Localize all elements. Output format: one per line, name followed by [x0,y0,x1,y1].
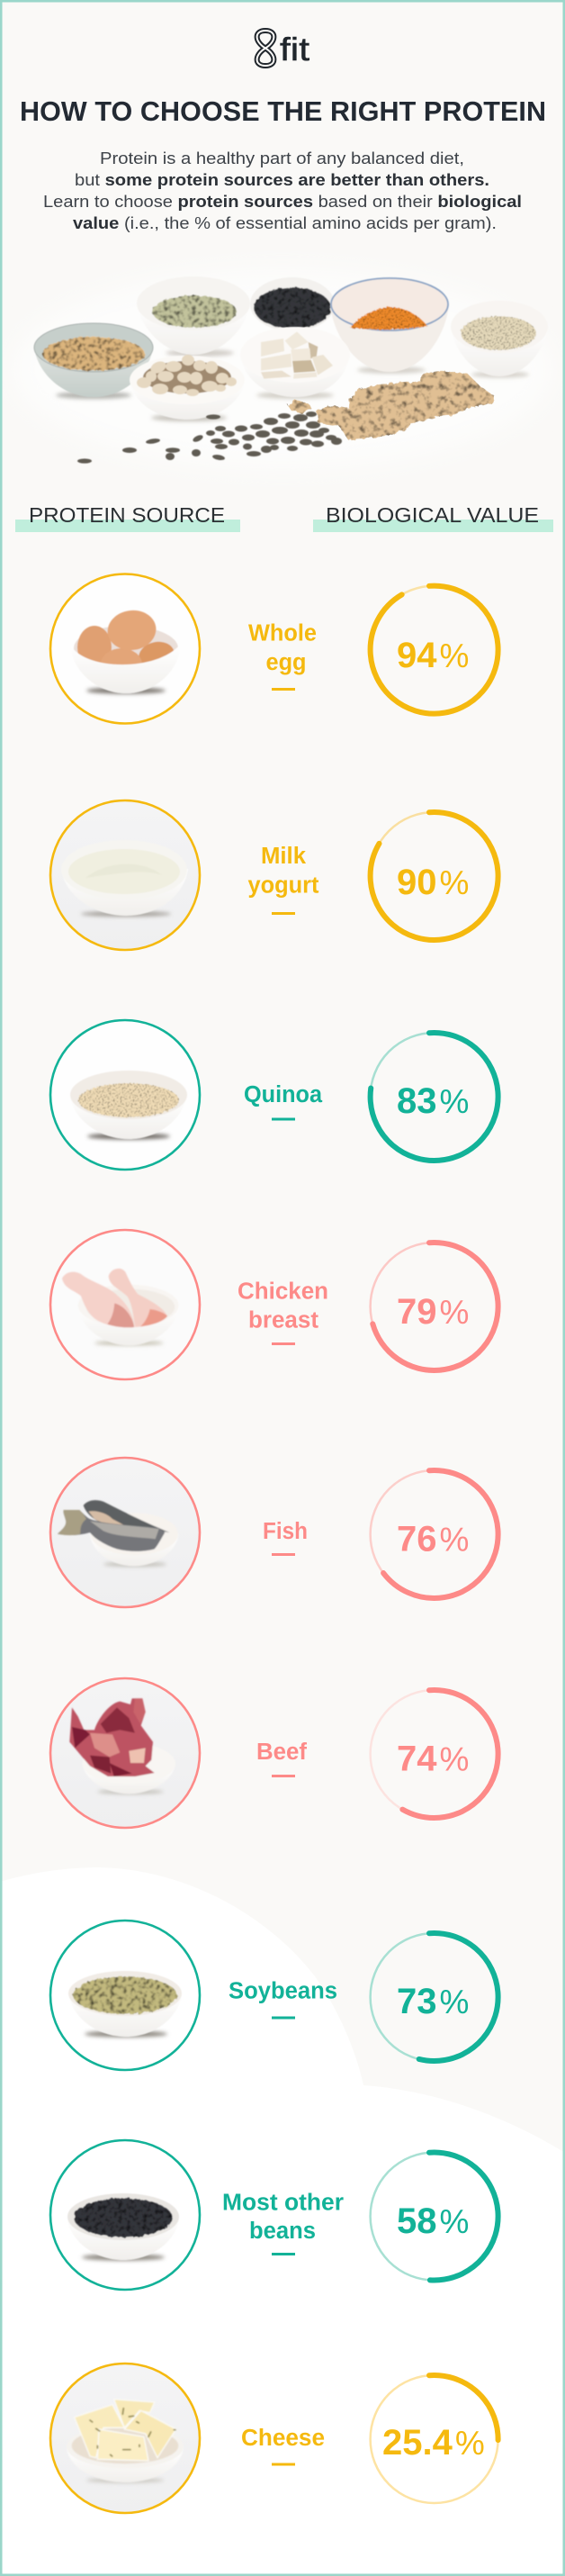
intro text: Learn to choose protein sources based on their biological [43,192,522,211]
row: chicken breast [50,1230,503,1379]
label [263,1519,308,1556]
label: beans [249,2219,316,2244]
label: Cheese [241,2426,325,2451]
label: yogurt [248,873,319,899]
pumpkin seeds [77,411,342,464]
ring 25.4% [365,2371,503,2508]
label: Chicken [238,1279,328,1304]
label: Soybeans [229,1979,337,2004]
ring 25.4%: 25.4% [382,2423,485,2463]
label: Whole [248,621,317,646]
white curved background shape [0,1867,565,2576]
row: milk yogurt [50,800,503,950]
photo: beef on plate [50,1678,200,1828]
ring 79% [365,1238,503,1375]
photo: cheese on plate [50,2364,200,2513]
label [229,1979,337,2019]
label [241,2426,325,2465]
label [222,2190,344,2255]
intro text: value (i.e., the % of essential amino acids per gram). [73,213,497,232]
row: beef [50,1678,503,1828]
walnuts [287,371,495,439]
label [244,1082,323,1120]
ring 83%: 83% [397,1081,469,1121]
label: egg [266,650,306,675]
label: Most other [222,2190,344,2215]
column header: protein source [15,503,240,532]
bowl: red lentils [330,278,449,374]
logo: 8fit: fit [280,31,309,68]
label: breast [248,1307,319,1333]
bowl: peas [137,276,250,357]
intro text [43,149,522,232]
bowl: chickpeas in grey bowl [34,323,153,399]
column header: biological value: BIOLOGICAL VALUE [326,503,539,527]
photo: chicken drumsticks on plate [50,1230,200,1379]
ring 83% [365,1028,503,1165]
ring 58% [365,2147,503,2285]
label: Fish [263,1519,308,1544]
ring 73%: 73% [397,1982,469,2021]
photo: soybeans bowl [50,1921,200,2070]
ring 79%: 79% [397,1292,469,1332]
ring 74%: 74% [397,1740,469,1779]
row: most other beans [50,2140,503,2290]
bowl: pistachios [130,355,246,421]
label [248,844,319,915]
label [248,621,317,691]
label: Beef [256,1740,308,1765]
ring 73% [365,1929,503,2065]
title: HOW TO CHOOSE THE RIGHT PROTEIN [20,96,546,127]
row: quinoa [50,1020,503,1170]
bowl: tofu [240,327,350,399]
row: soybeans [50,1921,503,2070]
bowl: quinoa [451,301,548,378]
photo: trout on plate [50,1458,200,1607]
intro text: Protein is a healthy part of any balanced diet, [100,149,464,167]
photo: quinoa bowl [50,1020,200,1170]
ring 90% [365,808,503,945]
row: whole egg [50,574,503,724]
bowl: black beans [250,277,335,331]
label: Milk [261,844,307,869]
column header: protein source: PROTEIN SOURCE [29,503,225,527]
ring 58%: 58% [397,2201,469,2241]
row: fish [50,1458,503,1607]
ring 94% [365,581,503,719]
ring 76%: 76% [397,1520,469,1559]
photo: eggs in bowl [50,574,200,724]
hero photo: bowls of protein foods [13,270,552,468]
ring 76% [365,1466,503,1603]
label [238,1279,328,1345]
photo: black beans bowl [50,2140,200,2290]
label: Quinoa [244,1082,323,1107]
logo: 8fit [257,31,309,68]
column header: biological value [313,503,553,532]
ring 90%: 90% [397,863,469,902]
photo: yogurt bowl [50,800,200,950]
label [256,1740,308,1777]
ring 94%: 94% [397,636,469,675]
intro text: but some protein sources are better than others. [75,170,489,189]
ring 74% [365,1686,503,1822]
row: cheese [50,2364,503,2513]
